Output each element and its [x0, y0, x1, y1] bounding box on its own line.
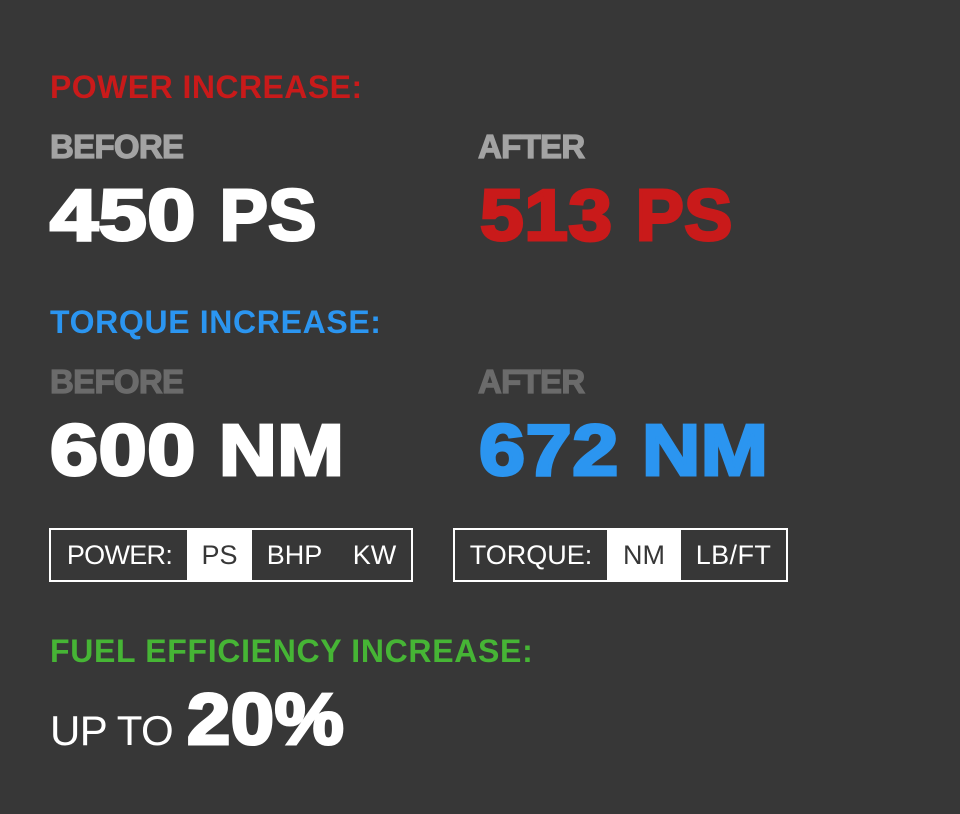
- value: 672 NM: NM: [642, 411, 768, 491]
- power label: POWER:: [67, 540, 172, 570]
- label: torque after: AFTER: [478, 363, 584, 400]
- heading: power increase: POWER INCREASE:: [50, 69, 363, 105]
- torque unit selector: [453, 528, 788, 582]
- label: torque before: BEFORE: [50, 363, 183, 400]
- option KW: KW: [353, 540, 396, 570]
- value: 513 PS: PS: [636, 176, 733, 256]
- power unit selector: [49, 528, 413, 582]
- value: 672 NM: [479, 411, 768, 491]
- option BHP: BHP: [267, 540, 322, 570]
- text: up to: UP TO: [50, 707, 173, 754]
- torque label: TORQUE:: [470, 540, 592, 570]
- value: 600 NM: [50, 411, 344, 491]
- label: power after: AFTER: [478, 128, 584, 165]
- option PS selected: PS: [201, 540, 238, 570]
- value: 600 NM: 600: [50, 411, 196, 491]
- label: power before: BEFORE: [50, 128, 183, 165]
- value: 672 NM: 672: [479, 411, 619, 491]
- value: 20%: 20%: [187, 680, 344, 760]
- value: 513 PS: [480, 176, 733, 256]
- heading: torque increase: TORQUE INCREASE:: [50, 304, 382, 340]
- value: 450 PS: PS: [220, 176, 317, 256]
- option NM selected: NM: [623, 540, 665, 570]
- value: 450 PS: [50, 176, 317, 256]
- heading: fuel efficiency increase: FUEL EFFICIENCY INCREASE:: [50, 633, 533, 669]
- option NM selected: [607, 530, 681, 580]
- value: 450 PS: 450: [50, 176, 196, 256]
- option PS selected: [187, 530, 252, 580]
- value: 513 PS: 513: [480, 176, 613, 256]
- option LB/FT: LB/FT: [696, 540, 771, 570]
- value: 600 NM: NM: [219, 411, 344, 491]
